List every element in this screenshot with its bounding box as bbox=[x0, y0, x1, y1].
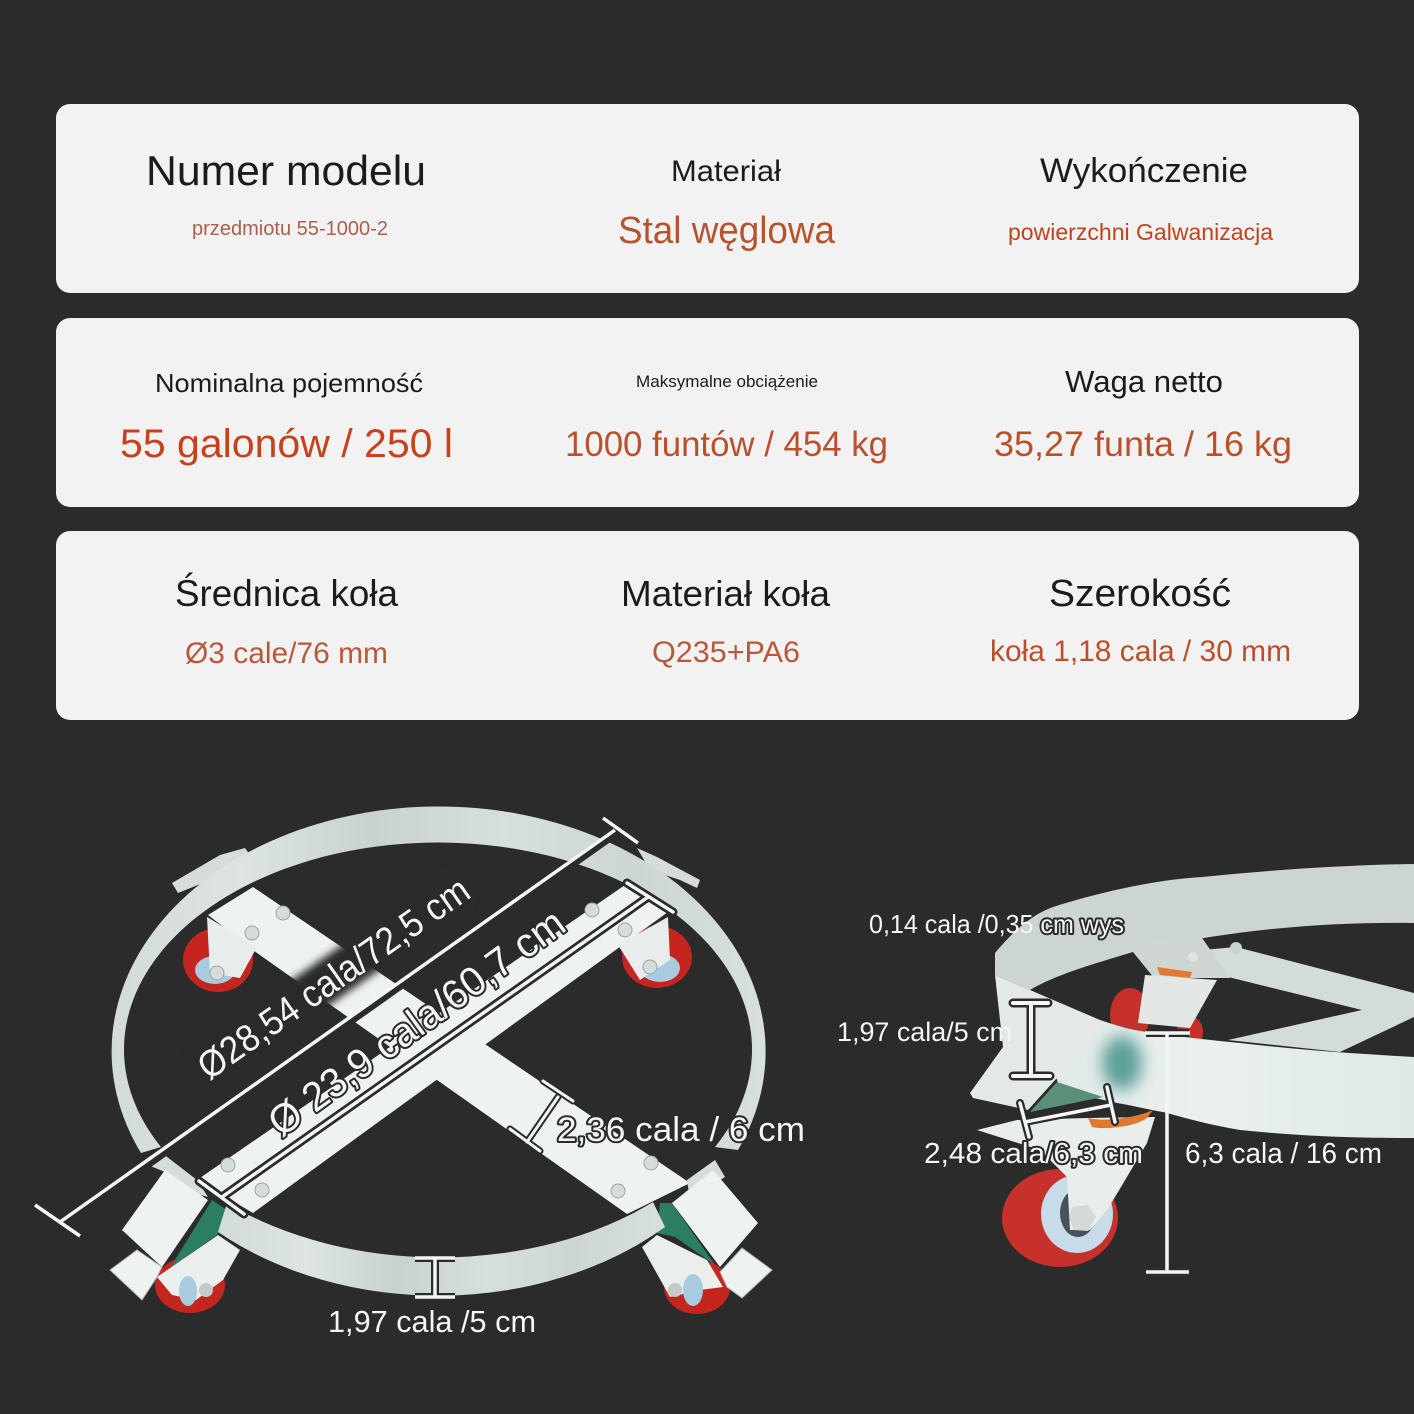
caster fork: rear left bbox=[207, 917, 257, 978]
heading: width: Szerokość bbox=[1049, 573, 1231, 615]
value: diameter: Ø3 cale/76 mm bbox=[185, 637, 388, 670]
label: inner diameter: Ø 23,9 cala/60,7 cm bbox=[259, 899, 573, 1145]
panel: wheel specifications bbox=[56, 531, 1359, 720]
label: plate width: 2,48 cala/6,3 cm bbox=[924, 1138, 1143, 1170]
value: carbon steel: Stal węglowa bbox=[618, 210, 836, 252]
label: bar width: 2,36 cala / 6 cm bbox=[557, 1111, 805, 1149]
value: wheel width: koła 1,18 cala / 30 mm bbox=[990, 635, 1291, 668]
label: thickness: 0,14 cala /0,35 cm wys bbox=[869, 909, 1124, 939]
dimension: total height marker bbox=[1145, 1033, 1190, 1272]
dimension: plate width marker bbox=[1020, 1087, 1115, 1137]
text mask behind outer diameter label bbox=[185, 870, 473, 1089]
diagram: dolly top view bbox=[35, 806, 805, 1339]
heading: net weight: Waga netto bbox=[1065, 364, 1223, 399]
cross bar rear-left to front-right bbox=[208, 887, 690, 1214]
heading: wheel diameter: Średnica koła bbox=[175, 572, 398, 614]
value: capacity: 55 galonów / 250 l bbox=[120, 422, 453, 466]
dimension: outer diameter line bbox=[35, 818, 638, 1236]
diagram: dolly side view bbox=[837, 864, 1414, 1272]
rear cross bars bbox=[1180, 947, 1414, 1052]
label: band height: 1,97 cala/5 cm bbox=[837, 1017, 1012, 1047]
front band of ring bbox=[1030, 990, 1414, 1138]
rear wheels bbox=[1110, 988, 1203, 1048]
dimension: band height marker bbox=[1013, 1003, 1050, 1076]
front caster fork bbox=[977, 1117, 1155, 1230]
value: weight: 35,27 funta / 16 kg bbox=[994, 425, 1292, 464]
heading: wheel material: Materiał koła bbox=[621, 573, 831, 614]
heading: maximum load: Maksymalne obciążenie bbox=[636, 373, 818, 391]
label: band height: 1,97 cala /5 cm bbox=[328, 1304, 536, 1339]
label: outer diameter: Ø28,54 cala/72,5 cm bbox=[190, 869, 478, 1088]
heading: model number: Numer modelu bbox=[146, 147, 426, 194]
label: total height: 6,3 cala / 16 cm bbox=[1185, 1138, 1382, 1170]
ring band: upper arc bbox=[112, 806, 766, 1153]
heading: nominal capacity: Nominalna pojemność bbox=[155, 368, 423, 398]
value: item number: przedmiotu 55-1000-2 bbox=[192, 218, 388, 240]
axle bolt bbox=[1069, 1205, 1096, 1231]
front caster wheel bbox=[1002, 1169, 1118, 1267]
cross bar front-left to rear-right bbox=[197, 885, 668, 1213]
flange tabs behind ring bbox=[172, 848, 700, 893]
heading: finish: Wykończenie bbox=[1040, 152, 1248, 190]
value: galvanization: powierzchni Galwanizacja bbox=[1008, 219, 1273, 245]
teal patch bbox=[1102, 1036, 1142, 1090]
orange washer bbox=[1088, 1110, 1153, 1128]
mounting plate bbox=[970, 975, 1103, 1110]
wheels: rear pair bbox=[183, 926, 692, 992]
caster: front left bbox=[110, 1153, 240, 1313]
ring band: lower arc bbox=[218, 1202, 665, 1296]
value: wheel material: Q235+PA6 bbox=[652, 636, 800, 669]
caster: front right bbox=[642, 1160, 772, 1314]
dimension: band height marker bbox=[415, 1258, 455, 1297]
dimension: bar width line bbox=[510, 1081, 573, 1151]
bolts bbox=[210, 903, 658, 1198]
value: load: 1000 funtów / 454 kg bbox=[565, 425, 888, 464]
green triangle bbox=[1030, 1082, 1103, 1112]
panel: capacity, load, weight bbox=[56, 318, 1359, 507]
caster fork: rear right bbox=[618, 917, 670, 980]
panel: model, material, finish bbox=[56, 104, 1359, 293]
heading: material: Materiał bbox=[671, 155, 781, 188]
rear caster mount bbox=[1133, 935, 1242, 1028]
back band of ring bbox=[995, 864, 1414, 990]
dimension: inner diameter line bbox=[199, 883, 673, 1214]
